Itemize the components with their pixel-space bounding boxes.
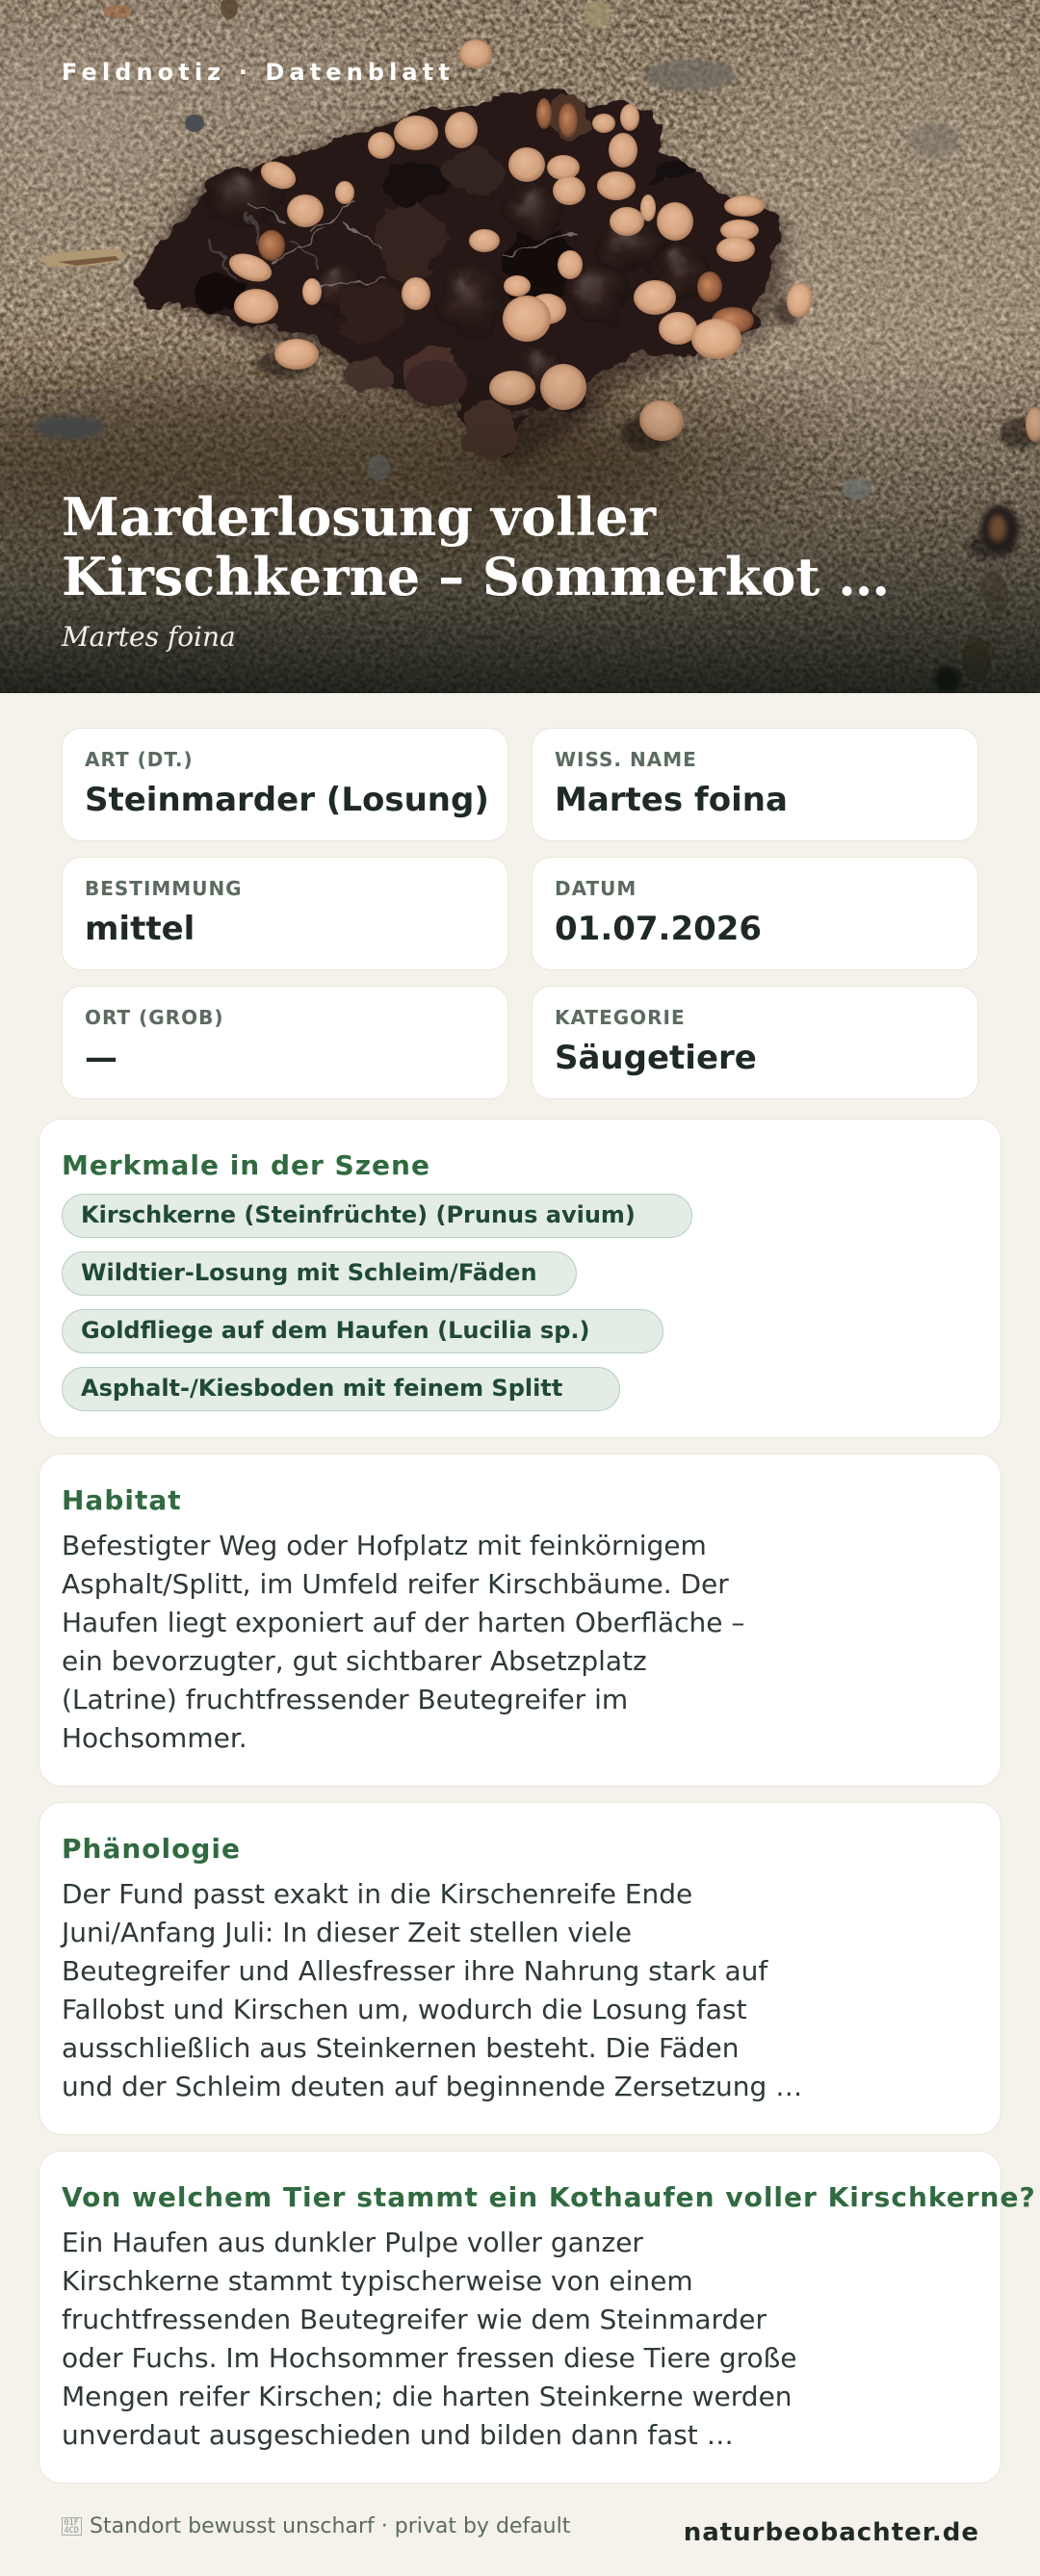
chip: Kirschkerne bbox=[62, 1194, 692, 1238]
chip: Asphaltboden bbox=[62, 1367, 620, 1411]
data card: Kategorie bbox=[532, 986, 978, 1099]
panel: Habitat bbox=[39, 1454, 1001, 1787]
icon: missing-glyph box: 01F bbox=[64, 2518, 79, 2528]
kicker: Feldnotiz · Datenblatt bbox=[62, 59, 455, 86]
text: Phänologie: Fallobst und Kirschen um, wodurch die Losung fast bbox=[62, 1994, 747, 2025]
data card: Bestimmung bbox=[62, 857, 508, 970]
text: Habitat: ein bevorzugter, gut sichtbarer Absetzplatz bbox=[62, 1645, 647, 1677]
data card: Bestimmung: mittel bbox=[85, 910, 195, 948]
text: Habitat bbox=[62, 1530, 744, 1754]
dark stone lower right and edge bbox=[405, 360, 1019, 693]
chip: Wildtier-Losung bbox=[62, 1251, 577, 1296]
data card: Datum bbox=[532, 857, 978, 970]
text: Antwort: unverdaut ausgeschieden und bilden dann fast … bbox=[62, 2419, 734, 2451]
chip: Asphaltboden: Asphalt-/Kiesboden mit feinem Splitt bbox=[81, 1375, 562, 1402]
front stones bbox=[274, 195, 1040, 446]
data card: wissenschaftlicher Name: Martes foina bbox=[555, 781, 788, 819]
data card: Art: ART (DT.) bbox=[85, 748, 194, 771]
data card: wissenschaftlicher Name bbox=[532, 728, 978, 841]
data card: Bestimmung: BESTIMMUNG bbox=[85, 877, 243, 900]
data card: Ort: — bbox=[85, 1039, 117, 1077]
text: Phänologie: ausschließlich aus Steinkernen besteht. Die Fäden bbox=[62, 2032, 739, 2064]
dark pulp mass bbox=[136, 89, 776, 460]
heading: Merkmale: Merkmale in der Szene bbox=[62, 1149, 430, 1181]
hero: photo with title bbox=[0, 0, 1040, 693]
title: Marderlosung voller bbox=[62, 486, 656, 548]
panel: Phänologie bbox=[39, 1802, 1001, 2135]
data card: Datum: DATUM bbox=[555, 877, 637, 900]
footer note with missing-glyph box bbox=[62, 2514, 570, 2538]
heading: Phänologie: Phänologie bbox=[62, 1833, 241, 1865]
text: Habitat: Hochsommer. bbox=[62, 1722, 247, 1754]
text: Antwort: oder Fuchs. Im Hochsommer fressen diese Tiere große bbox=[62, 2342, 797, 2374]
text: Antwort: Mengen reifer Kirschen; die harten Steinkerne werden bbox=[62, 2381, 793, 2412]
chip: Wildtier-Losung: Wildtier-Losung mit Schleim/Fäden bbox=[81, 1259, 537, 1286]
title bbox=[62, 486, 890, 607]
chip: Goldfliege bbox=[62, 1309, 663, 1353]
data card: Kategorie: KATEGORIE bbox=[555, 1006, 686, 1029]
footer brand: naturbeobachter.de bbox=[684, 2518, 979, 2547]
text: Habitat: Haufen liegt exponiert auf der harten Oberfläche – bbox=[62, 1607, 744, 1638]
text: Phänologie: Juni/Anfang Juli: In dieser Zeit stellen viele bbox=[62, 1917, 632, 1948]
text: Habitat: (Latrine) fruchtfressender Beutegreifer im bbox=[62, 1684, 628, 1715]
text: Habitat: Befestigter Weg oder Hofplatz mit feinkörnigem bbox=[62, 1530, 707, 1561]
text: Antwort: Kirschkerne stammt typischerweise von einem bbox=[62, 2265, 693, 2297]
heading: Habitat: Habitat bbox=[62, 1484, 182, 1516]
panel: Merkmale bbox=[39, 1119, 1001, 1438]
icon: missing-glyph box: 4CD bbox=[64, 2526, 79, 2536]
footer text: Standort bewusst unscharf · privat by default bbox=[90, 2514, 570, 2538]
text: Antwort: fruchtfressenden Beutegreifer wie dem Steinmarder bbox=[62, 2304, 767, 2335]
data card: Ort: ORT (GROB) bbox=[85, 1006, 223, 1029]
panel: Frage bbox=[39, 2151, 1001, 2484]
text: Phänologie: Beutegreifer und Allesfresser ihre Nahrung stark auf bbox=[62, 1955, 767, 1987]
text: Antwort bbox=[62, 2227, 797, 2451]
cast shadows of isolated stones bbox=[256, 299, 1040, 558]
heading: Frage: Von welchem Tier stammt ein Kothaufen voller Kirschkerne? bbox=[62, 2181, 1036, 2213]
data card: Kategorie: Säugetiere bbox=[555, 1039, 757, 1077]
chip: Kirschkerne: Kirschkerne (Steinfrüchte) (Prunus avium) bbox=[81, 1201, 636, 1228]
data card: wissenschaftlicher Name: WISS. NAME bbox=[555, 748, 697, 771]
shadow under the pile bbox=[136, 125, 785, 470]
text: Phänologie: Der Fund passt exakt in die Kirschenreife Ende bbox=[62, 1878, 692, 1910]
loose cherry stones: pale bbox=[225, 39, 656, 323]
text: Phänologie bbox=[60, 1878, 802, 2102]
chip: Goldfliege: Goldfliege auf dem Haufen (Lucilia sp.) bbox=[81, 1317, 589, 1344]
data card: Ort bbox=[62, 986, 508, 1099]
stones and leaf on the ground bbox=[35, 0, 1012, 617]
title: Kirschkerne – Sommerkot … bbox=[62, 546, 890, 607]
text: Phänologie: und der Schleim deuten auf beginnende Zersetzung … bbox=[62, 2071, 802, 2102]
stones in the darker pile: brown bbox=[258, 98, 722, 302]
data card: Datum: 01.07.2026 bbox=[555, 910, 762, 948]
icon: missing-glyph box bbox=[62, 2517, 82, 2536]
data card: Art: Steinmarder (Losung) bbox=[85, 781, 489, 819]
text: Antwort: Ein Haufen aus dunkler Pulpe voller ganzer bbox=[62, 2227, 643, 2258]
text: Habitat: Asphalt/Splitt, im Umfeld reifer Kirschbäume. Der bbox=[62, 1568, 729, 1600]
data card: Art bbox=[62, 728, 508, 841]
scientific name subtitle: Martes foina bbox=[62, 621, 236, 653]
photo: cherry-stone droppings on asphalt bbox=[0, 0, 1040, 693]
